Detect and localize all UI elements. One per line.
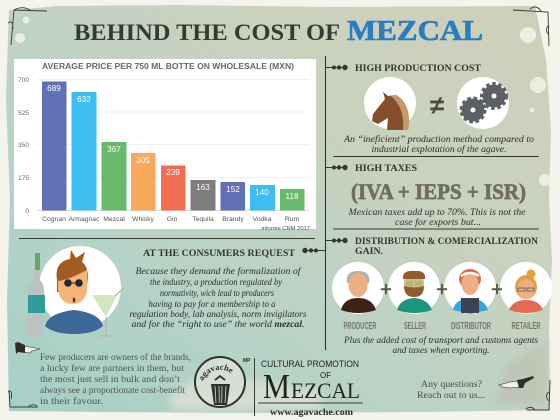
role labels <box>344 321 541 332</box>
cultural promotion block: EZCAL <box>291 378 360 403</box>
chart source: informe CRM 2017 <box>261 226 310 232</box>
callout text <box>40 352 191 407</box>
heading: HIGH PRODUCTION COST <box>355 63 482 74</box>
icon: person with bottle and glass <box>27 246 124 337</box>
call to action <box>417 376 534 401</box>
role labels: DISTRIBUTOR <box>451 321 491 332</box>
chart title: AVERAGE PRICE PER 750 ML BOTTE ON WHOLESALE (MXN) <box>42 62 294 71</box>
bar chart: average price: 367 <box>107 145 121 154</box>
icon: pointing hand <box>499 376 534 388</box>
role labels: SELLER <box>404 321 426 332</box>
timeline dividers <box>19 56 539 350</box>
bar chart: average price: 163 <box>196 183 210 192</box>
description: Because they demand the formalization of <box>136 266 302 277</box>
bar chart: average price: Tequila <box>192 216 214 223</box>
call to action: Reach out to us... <box>417 390 485 401</box>
bar chart: average price: Gin <box>167 216 178 223</box>
icon: gears <box>457 77 509 129</box>
logo: agavache: MP <box>243 358 251 364</box>
icon: seller <box>388 262 440 314</box>
description <box>130 266 307 330</box>
plus signs: + <box>436 279 448 301</box>
title <box>74 16 483 47</box>
bar chart: average price: 305 <box>136 156 150 165</box>
bar chart: average price: 689 <box>47 84 61 93</box>
bar chart: average price: 632 <box>77 95 91 104</box>
bar chart: average price: Armagnac <box>69 216 100 223</box>
section: high taxes: case for exports but... <box>395 217 481 228</box>
section: distribution and commercialization <box>332 236 552 356</box>
bar chart: average price: Mezcal <box>103 216 125 223</box>
bar chart: average price: 525 <box>18 110 29 117</box>
bar chart: average price: 140 <box>255 188 269 197</box>
bar chart: average price <box>14 59 316 232</box>
plus signs: + <box>380 279 392 301</box>
section: high taxes <box>347 163 526 228</box>
bar chart: average price: 118 <box>285 192 299 201</box>
bar chart: average price: 239 <box>166 168 180 177</box>
icon: horse <box>364 77 416 130</box>
callout text: in their favour. <box>40 396 103 407</box>
bar chart: average price: Rum <box>285 216 300 223</box>
description: An “ineficient” production method compared to <box>343 134 534 145</box>
cultural promotion block <box>254 358 363 417</box>
section: high production cost: industrial explotation of the agave. <box>372 144 506 155</box>
bar chart: average price: 700 <box>18 77 29 84</box>
cultural promotion block: OF <box>320 371 331 380</box>
icon: retailer <box>500 262 552 314</box>
plus signs: + <box>491 279 503 301</box>
bar chart: average price: 0 <box>25 208 29 215</box>
title: MEZCAL <box>347 16 483 47</box>
heading: HIGH TAXES <box>355 163 417 174</box>
callout text: Few producers are owners of the brands, <box>40 352 191 363</box>
tax formula: (IVA + IEPS + ISR) <box>351 179 526 204</box>
description: regulation body, lab analysis, norm invigilators <box>130 309 307 320</box>
role labels: PRODUCER <box>344 321 377 332</box>
bar chart: average price: Cognan <box>42 216 66 223</box>
title: BEHIND THE COST OF <box>74 20 340 46</box>
icon: producer <box>332 262 384 314</box>
section: high production cost <box>343 63 534 155</box>
bar chart: average price: Brandy <box>222 216 244 223</box>
section: distribution and commercialization: and taxes when exporting. <box>392 345 490 356</box>
callout text: a lucky few are partners in them, but <box>40 363 184 374</box>
logo: agavache <box>194 356 251 408</box>
icon: distributor <box>444 262 496 314</box>
bar chart: average price: 350 <box>18 142 29 149</box>
callout text: the most just sell in bulk and don’t <box>40 375 180 385</box>
heading: DISTRIBUTION & COMERCIALIZATION <box>355 236 538 247</box>
callout text: always see a proportionate cost-benefit <box>40 385 185 396</box>
section: at the consumers request <box>27 246 307 337</box>
section: distribution and commercialization: GAIN. <box>355 246 383 257</box>
not equal sign: ≠ <box>430 90 444 120</box>
description: Mexican taxes add up to 70%. This is not the <box>347 207 526 218</box>
cultural promotion block: CULTURAL PROMOTION <box>261 359 359 369</box>
bar chart: average price: Whisky <box>132 216 155 223</box>
bar chart: average price: 175 <box>18 175 29 182</box>
bar chart: average price: Vodka <box>253 216 272 223</box>
callout: few producers <box>15 342 191 407</box>
bar chart: average price: 152 <box>226 185 240 194</box>
description: having to pay for a membership to a <box>148 299 276 310</box>
icon: pointing hand <box>15 342 40 354</box>
description: Plus the added cost of transport and customs agents <box>343 335 538 346</box>
description: normativity, wich lead to producers <box>160 288 274 299</box>
plus signs <box>380 279 503 301</box>
role labels: RETAILER <box>512 321 541 332</box>
description: and for the “right to use” the world mezcal. <box>132 319 304 330</box>
cultural promotion block: M <box>263 367 290 406</box>
call to action: Any questions? <box>421 379 482 390</box>
description: the industry, a production regulated by <box>150 277 283 288</box>
heading: AT THE CONSUMERS REQUEST <box>143 248 296 259</box>
logo: agavache: agavache <box>200 364 232 380</box>
cultural promotion block: www.agavache.com <box>270 407 354 417</box>
